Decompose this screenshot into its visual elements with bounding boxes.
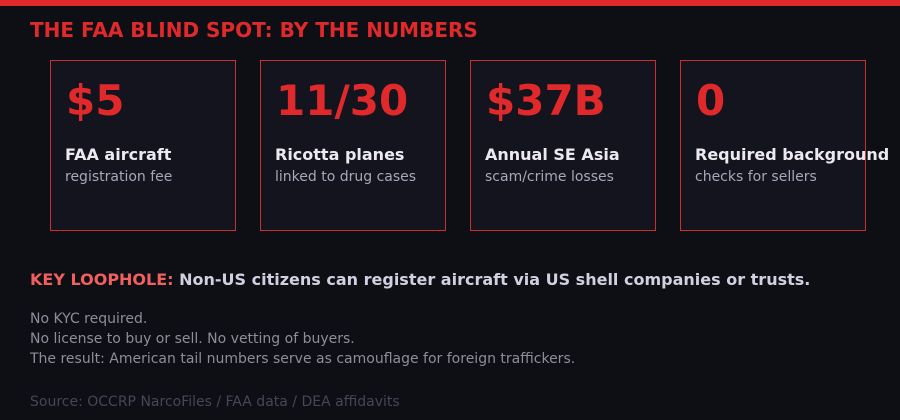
source: Source: OCCRP NarcoFiles / FAA data / DEA affidavits xyxy=(30,394,400,410)
card: $5: FAA aircraft xyxy=(65,145,171,164)
card: 0: checks for sellers xyxy=(695,169,817,185)
card: $5: $5 xyxy=(66,76,124,125)
top red bar xyxy=(0,0,900,6)
card: $5 xyxy=(50,60,236,231)
card: 11/30 xyxy=(260,60,446,231)
details text: The result: American tail numbers serve as camouflage for foreign traffickers. xyxy=(30,351,575,367)
card: $37B: Annual SE Asia xyxy=(485,145,620,164)
card: 11/30: Ricotta planes xyxy=(275,145,404,164)
card: 11/30: 11/30 xyxy=(276,76,408,125)
card: $5: registration fee xyxy=(65,169,172,185)
details text xyxy=(30,311,575,367)
card: 0: 0 xyxy=(696,76,725,125)
title: THE FAA BLIND SPOT: BY THE NUMBERS xyxy=(30,18,478,42)
card: 0: Required background xyxy=(695,145,889,164)
card: $37B: $37B xyxy=(486,76,606,125)
card: $37B: scam/crime losses xyxy=(485,169,614,185)
card: 0 xyxy=(680,60,866,231)
details text: No license to buy or sell. No vetting of buyers. xyxy=(30,331,355,347)
card: $37B xyxy=(470,60,656,231)
key loophole: KEY LOOPHOLE: Non-US citizens can register aircraft via US shell companies or trusts. xyxy=(30,270,810,289)
details text: No KYC required. xyxy=(30,311,147,327)
card: 11/30: linked to drug cases xyxy=(275,169,416,185)
